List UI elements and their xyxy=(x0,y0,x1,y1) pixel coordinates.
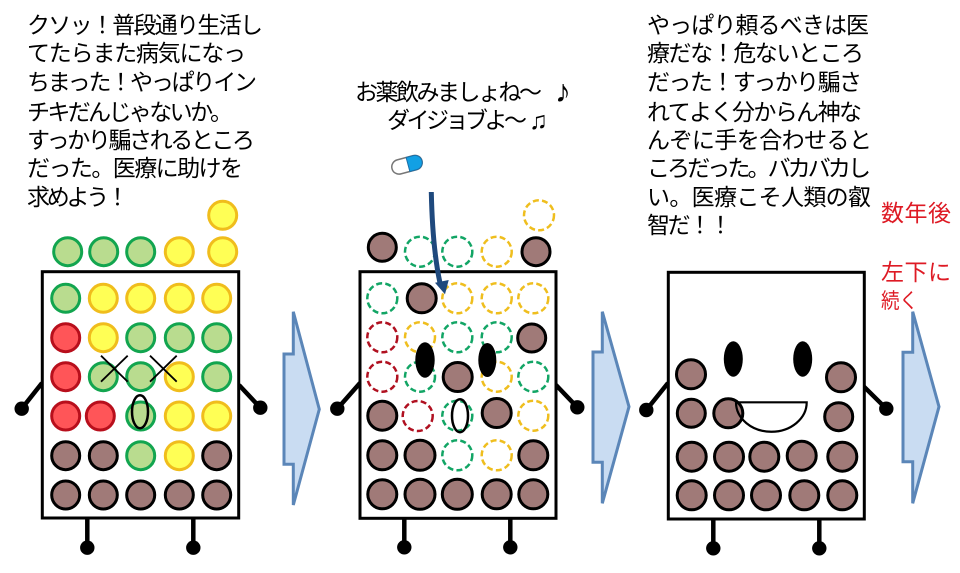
label: years later: 数年後 xyxy=(881,200,951,226)
label: continues bottom left xyxy=(881,259,951,313)
icon: medicine capsule xyxy=(390,154,424,176)
remaining cells in the right body xyxy=(676,360,857,510)
text block: right speech: んぞに手を合わせると xyxy=(647,127,872,153)
label: continues bottom left: 左下に xyxy=(881,259,951,285)
text block: right speech: れてよく分からん神な xyxy=(647,99,862,125)
text block: right speech: だった！すっかり騙さ xyxy=(647,69,862,95)
arrow: first transition xyxy=(284,312,319,505)
text block: right speech xyxy=(647,12,872,238)
panel: recovered character xyxy=(639,272,894,556)
text block: left speech: てたらまた病気になっ xyxy=(27,40,246,66)
limbs: middle character arms and legs xyxy=(330,383,584,554)
text block: left speech: チキだんじゃないか。 xyxy=(27,99,233,125)
text block: left speech: 求めよう！ xyxy=(27,184,129,210)
text block: right speech: 智だ！！ xyxy=(647,212,732,238)
text block: left speech xyxy=(27,12,263,210)
arrow: second transition xyxy=(593,312,629,503)
face: smiling eyes and mouth xyxy=(724,341,812,432)
cells inside the middle body xyxy=(367,283,548,509)
text block: right speech: い。医療こそ人類の叡 xyxy=(647,184,871,210)
panel: medicated character xyxy=(330,192,584,554)
text block: left speech: クソッ！普段通り生活し xyxy=(27,12,263,38)
text block: right speech: ころだった。バカバカし xyxy=(647,155,871,181)
arrow: continuation xyxy=(903,312,939,503)
cells overflowing above the middle body xyxy=(368,200,554,267)
face: oval eyes and mouth xyxy=(415,342,496,432)
text block: nurse speech xyxy=(355,73,571,135)
label: continues bottom left: 続く xyxy=(881,290,918,313)
body: left character xyxy=(42,272,239,518)
cells inside the left body xyxy=(52,284,231,509)
text block: right speech: やっぱり頼るべきは医 xyxy=(647,12,869,38)
text block: nurse speech: お薬飲みましょね～ xyxy=(355,79,542,105)
face: X eyes and mouth xyxy=(101,356,177,428)
text block: left speech: すっかり騙されるところ xyxy=(27,127,255,153)
text block: left speech: ちまった！やっぱりイン xyxy=(27,69,257,95)
limbs: right character arms and legs xyxy=(639,383,894,556)
body: middle character xyxy=(360,272,556,518)
text block: nurse speech: ♪ xyxy=(555,73,571,109)
limbs: left character arms and legs xyxy=(15,383,268,555)
text block: left speech: だった。医療に助けを xyxy=(27,155,243,181)
arrow: capsule entering the body xyxy=(431,192,449,294)
text block: nurse speech: ダイジョブよ～ xyxy=(387,107,527,133)
cells overflowing above the left body xyxy=(54,201,237,266)
body: right character xyxy=(668,272,864,519)
panel: sick character xyxy=(15,201,268,555)
text block: right speech: 療だな！危ないところ xyxy=(647,40,864,66)
text block: nurse speech: ♫ xyxy=(529,107,548,135)
